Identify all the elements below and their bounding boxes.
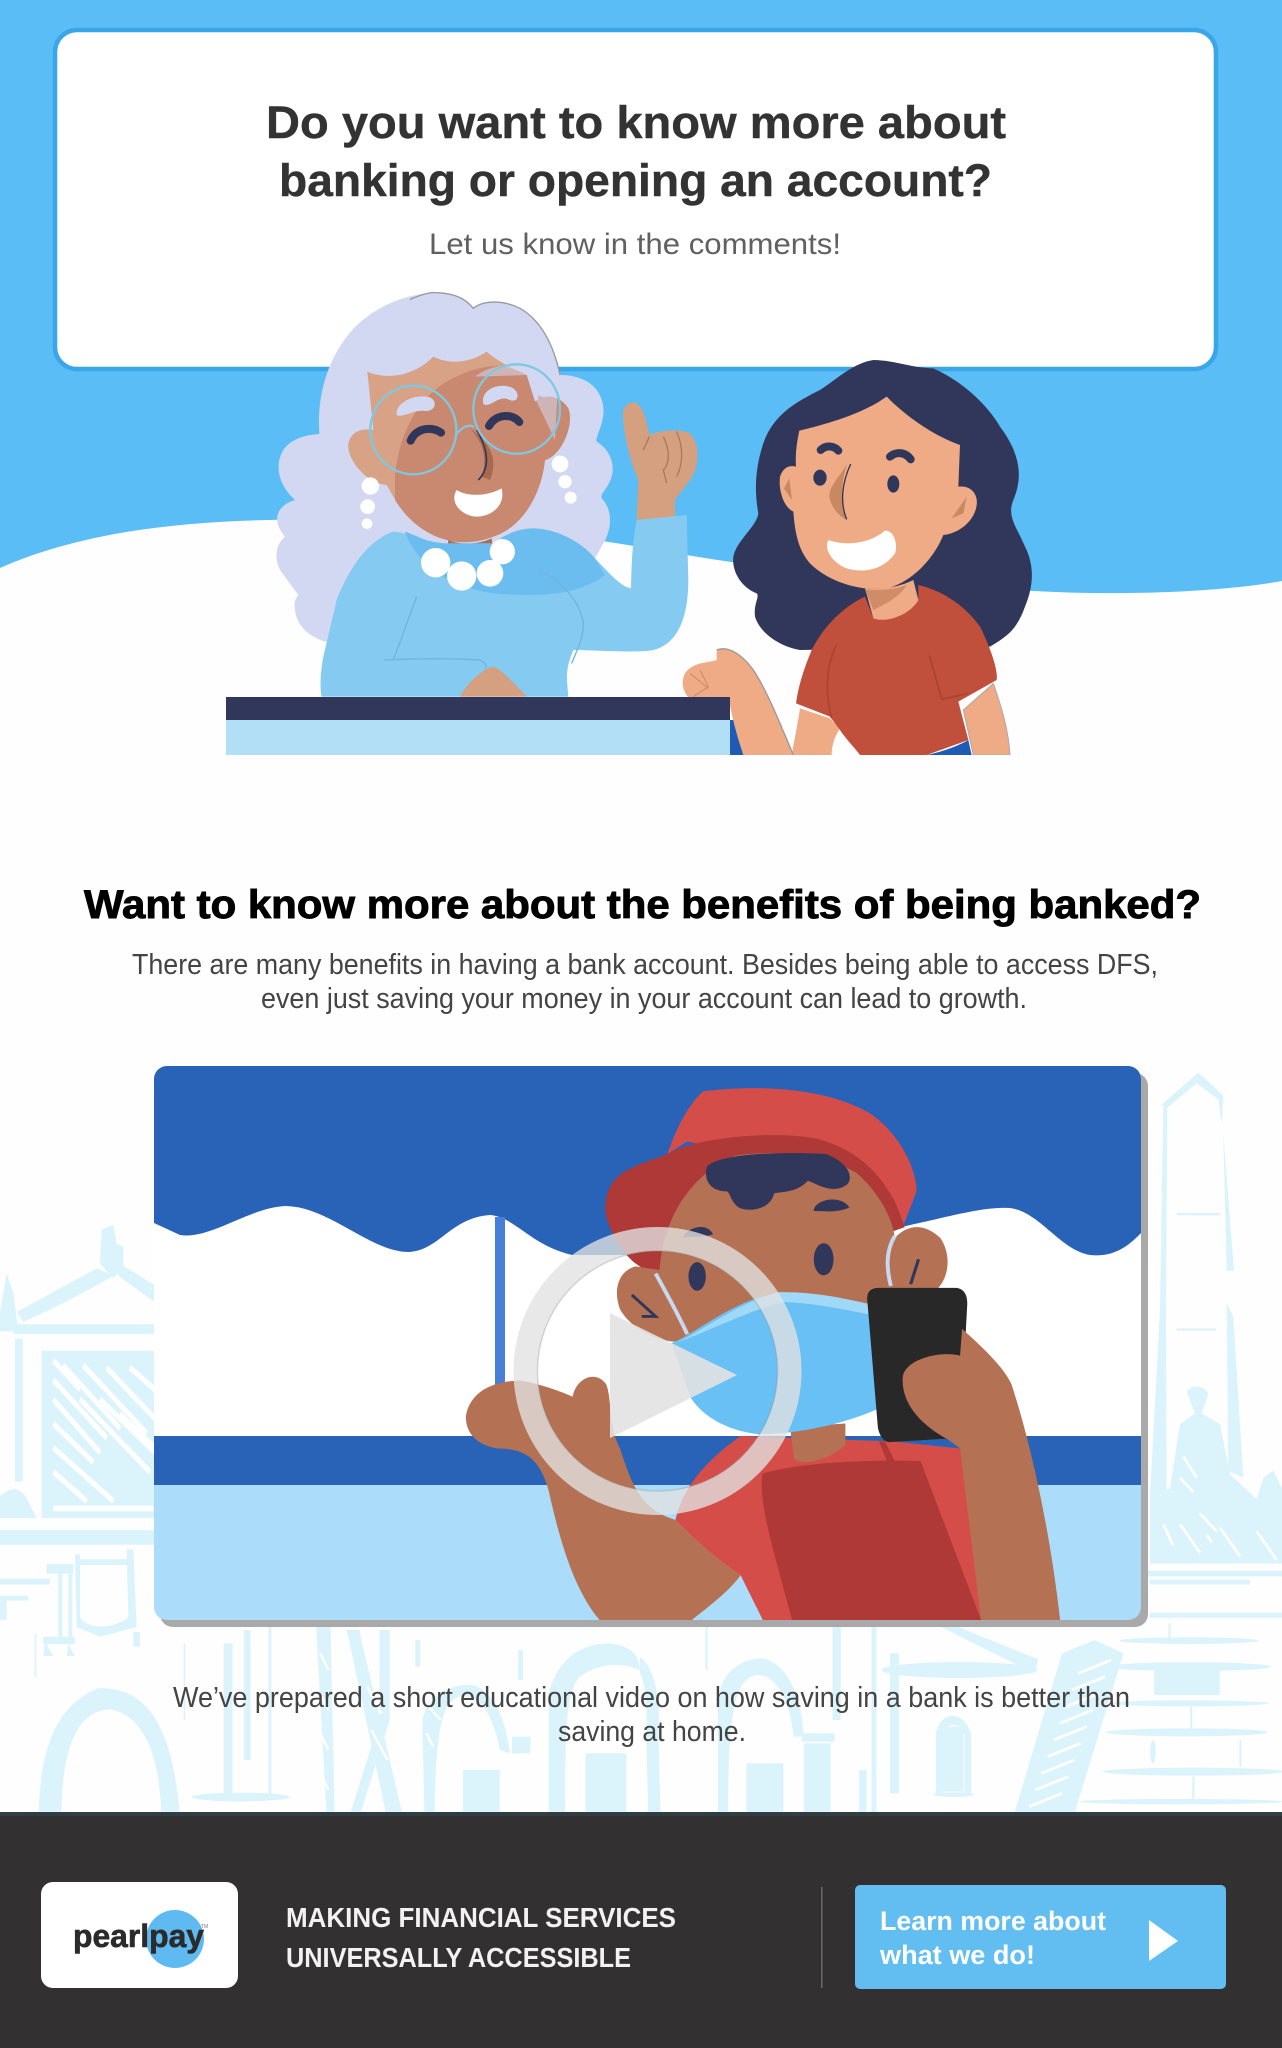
footer bar <box>0 1812 1282 2048</box>
blue skirt strip behind counter <box>730 720 745 755</box>
woman skirt <box>927 740 972 755</box>
woman face <box>780 397 977 589</box>
grandmother mouth <box>454 488 502 517</box>
button: learn more <box>855 1885 1226 1989</box>
text: benefits description <box>132 949 1158 1015</box>
counter front <box>226 720 730 755</box>
blue wave header background <box>0 0 1282 593</box>
sketch: bottom left arches and ladders <box>35 1627 640 1812</box>
text: video description: We’ve prepared a short educational video on how saving in a bank is better than <box>173 1682 1130 1714</box>
slogan: MAKING FINANCIAL SERVICES <box>286 1902 676 1933</box>
vendor left arm and hand <box>466 1377 741 1627</box>
heading: benefits: Want to know more about the benefits of being banked? <box>84 883 1201 927</box>
video thumbnail <box>154 1066 1148 1627</box>
mask <box>671 1293 877 1434</box>
woman nose <box>829 465 847 520</box>
grandmother face <box>348 352 570 542</box>
vendor right hand <box>903 1329 1061 1627</box>
woman neck <box>865 580 918 620</box>
grandmother necklace <box>421 539 515 591</box>
vendor face <box>617 1153 948 1342</box>
stall white wall <box>154 1066 1141 1436</box>
vendor shirt <box>675 1436 984 1627</box>
floor <box>154 1485 1141 1620</box>
vendor neck <box>790 1424 845 1462</box>
grandmother brows <box>397 396 435 416</box>
awning <box>154 1066 1141 1255</box>
slogan <box>286 1902 676 1973</box>
counter band <box>154 1436 1141 1486</box>
vendor apron strap <box>879 1441 895 1461</box>
trademark: TM <box>201 1924 208 1930</box>
button label: Learn more about <box>880 1906 1106 1936</box>
heading: question: banking or opening an account? <box>279 155 992 206</box>
logo wordmark: pearlpay <box>73 1918 204 1954</box>
woman hand on counter <box>683 649 793 755</box>
vendor eyes <box>814 1243 834 1275</box>
slogan: UNIVERSALLY ACCESSIBLE <box>286 1942 631 1973</box>
vendor ear marks <box>632 1259 919 1316</box>
counter top <box>226 697 730 720</box>
grandmother neck <box>448 538 492 544</box>
woman hair <box>733 360 1032 650</box>
sketch: left building <box>0 1225 155 1656</box>
text: video description <box>173 1682 1130 1748</box>
text: benefits description: even just saving your money in your account can lead to growth. <box>261 983 1027 1015</box>
play triangle <box>610 1313 737 1438</box>
pole <box>495 1217 505 1384</box>
text: video description: saving at home. <box>558 1716 746 1748</box>
woman mouth <box>827 531 896 570</box>
vendor brows <box>683 1200 849 1238</box>
grandmother sweater <box>321 515 688 697</box>
sketch: bottom right arches and terrace <box>640 1620 1282 1812</box>
grandmother glasses <box>370 364 560 474</box>
heading: question: Do you want to know more about <box>266 97 1006 148</box>
woman shirt <box>796 585 997 755</box>
text: let us know: Let us know in the comments! <box>429 228 841 261</box>
grandmother earrings <box>360 456 577 529</box>
woman ears <box>784 478 967 518</box>
button label <box>879 1906 1106 1970</box>
logo card <box>41 1882 238 1988</box>
grandmother eyes <box>411 416 519 441</box>
video shadow <box>160 1073 1148 1627</box>
vendor hair <box>706 1153 850 1210</box>
heading: question <box>266 97 1006 206</box>
logo circle <box>146 1910 204 1968</box>
grandmother hair <box>276 293 613 642</box>
mask straps <box>656 1236 895 1334</box>
vendor hat <box>667 1088 917 1234</box>
background street sketch <box>0 1072 1282 1812</box>
phone <box>867 1288 967 1442</box>
button label: what we do! <box>879 1940 1035 1970</box>
speech panel: question <box>55 30 1216 369</box>
character: grandmother <box>276 293 697 697</box>
grandmother nose <box>470 428 493 480</box>
icon: button arrow <box>1149 1920 1178 1961</box>
woman brows <box>821 446 911 459</box>
character: masked vendor <box>466 1088 1061 1627</box>
play button <box>526 1239 790 1503</box>
grandmother hand raised <box>623 402 697 520</box>
sketch: right tower and figure <box>1147 1072 1282 1618</box>
play ring <box>526 1239 790 1503</box>
grandmother forearm on counter <box>460 667 527 697</box>
woman arms <box>963 683 1010 755</box>
text: benefits description: There are many benefits in having a bank account. Besides being able to access DFS, <box>132 949 1158 981</box>
illustration: two women at a counter <box>226 293 1032 755</box>
woman eyes <box>813 470 827 486</box>
character: younger woman <box>683 360 1032 755</box>
vendor apron <box>762 1461 984 1627</box>
